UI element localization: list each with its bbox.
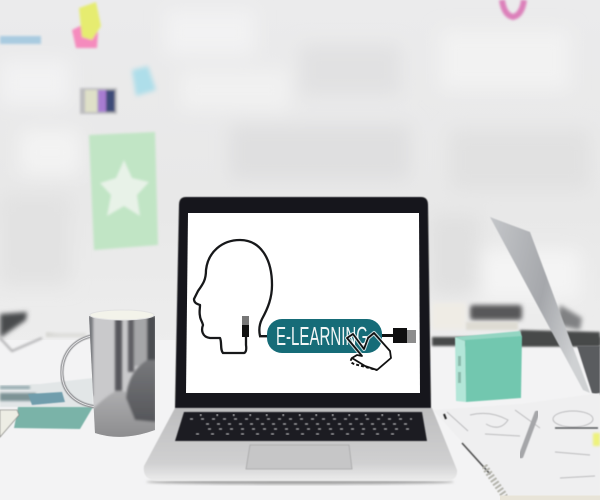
- dark items right: [432, 337, 600, 346]
- dark device left: [0, 312, 27, 338]
- sticky notes pink and yellow: [72, 2, 101, 48]
- wall decorations: [0, 0, 524, 250]
- notebook spiral: [462, 443, 490, 474]
- sketch papers and pen bottom right: [433, 393, 600, 500]
- second laptop seen from the side: [490, 217, 600, 395]
- laptop screen: [186, 213, 420, 393]
- laptop lid bezel: [175, 197, 431, 408]
- cable and large usb plug: [382, 328, 416, 343]
- laptop base: [144, 408, 457, 484]
- colour swatch card: [80, 88, 117, 114]
- icon: pointing hand cursor: [347, 333, 391, 370]
- e-learning pill button: [267, 319, 382, 353]
- light blue note: [132, 66, 156, 96]
- mug lower reflection: [92, 391, 156, 440]
- blue eraser: [28, 392, 65, 405]
- main laptop: [144, 197, 457, 484]
- cable into pill: [259, 335, 269, 337]
- green cutting mat: [14, 407, 93, 429]
- keyboard: [175, 412, 427, 441]
- mug handle: [62, 336, 97, 407]
- printed paper: [0, 378, 93, 407]
- yellow sticky tab: [593, 433, 600, 446]
- sketch lines: [444, 410, 598, 478]
- mug body: [89, 316, 155, 437]
- silver pen: [521, 413, 537, 456]
- desk surface: [0, 340, 600, 500]
- teal box speaker: [455, 331, 522, 402]
- trackpad: [246, 445, 352, 469]
- icon: head outline with cable: [194, 240, 272, 353]
- pink ring top right: [502, 0, 524, 17]
- mug rim: [90, 310, 154, 320]
- desk papers and stationery left: [0, 378, 93, 437]
- notebook corner: [0, 410, 19, 437]
- green star card: [89, 132, 158, 250]
- icon: small usb plug: [242, 316, 249, 337]
- pill label: E-LEARNING: [276, 321, 368, 351]
- silver mug: [62, 310, 158, 442]
- blurred items behind the laptop: [0, 303, 600, 351]
- blurred white brick wall background: [0, 0, 600, 345]
- blue label strip: [0, 36, 41, 44]
